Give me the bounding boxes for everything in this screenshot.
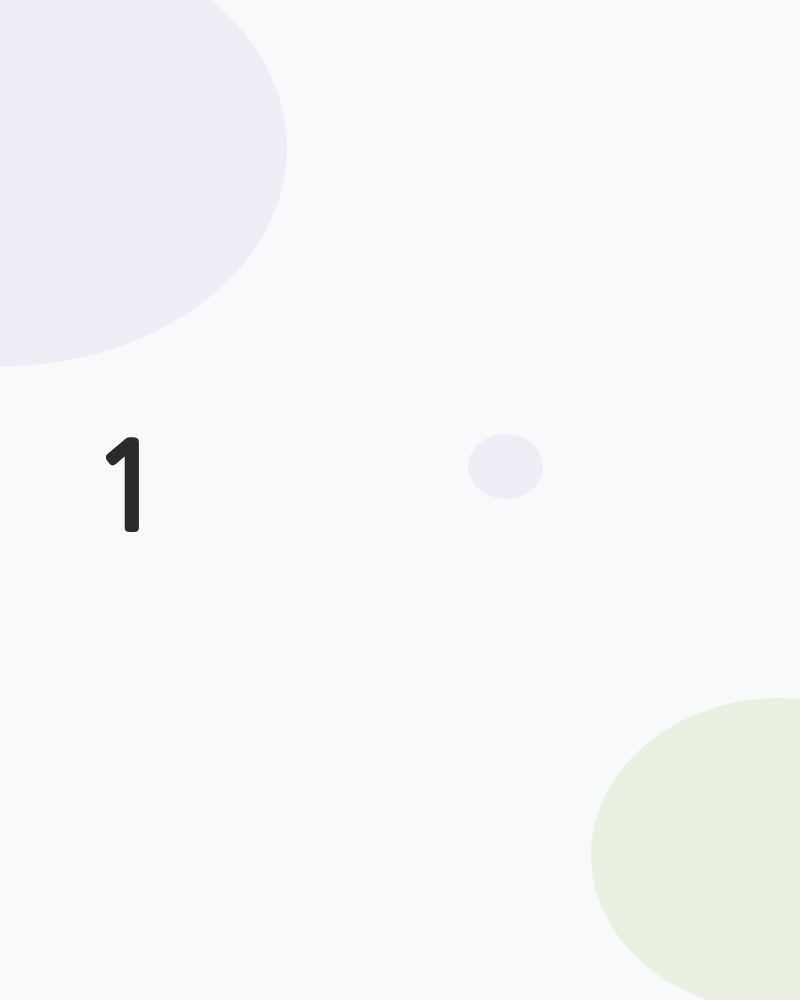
blob: large lavender ellipse top left <box>0 0 287 366</box>
number: 1: 1 <box>92 428 164 546</box>
blob: green ellipse bottom right <box>591 698 800 1000</box>
blob: small lavender ellipse centre <box>468 434 543 499</box>
